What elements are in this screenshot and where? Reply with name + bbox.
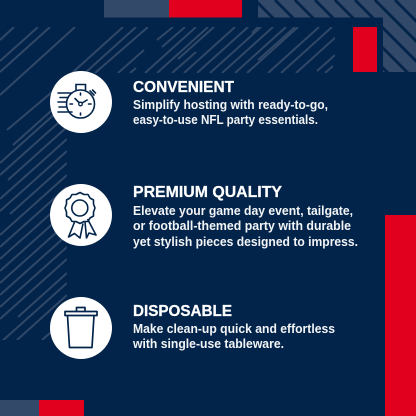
top right striped block [258, 0, 416, 72]
text: convenient [133, 79, 328, 127]
top slate bar [104, 0, 169, 18]
text: disposable [132, 303, 335, 351]
body: convenient line 2: easy-to-use NFL party essentials. [133, 112, 318, 127]
body: disposable line 2: with single-use tableware. [132, 336, 284, 351]
diagonal stripe texture, top and left [0, 27, 347, 343]
bottom slate bar [0, 400, 39, 416]
icon: stopwatch in white circle [50, 71, 112, 133]
body: premium quality line 3: yet stylish pieces designed to impress. [133, 234, 358, 249]
icon: trash bin in white circle [50, 297, 112, 359]
body: disposable line 1: Make clean-up quick and effortless [133, 321, 335, 336]
body: convenient line 1: Simplify hosting with ready-to-go, [133, 97, 328, 112]
heading: premium quality: PREMIUM QUALITY [133, 184, 282, 201]
heading: disposable: DISPOSABLE [133, 303, 232, 320]
heading: convenient: CONVENIENT [133, 79, 234, 96]
red accent block, lower right [385, 215, 416, 416]
body: premium quality line 2: or football-themed party with durable [133, 218, 351, 233]
text: premium quality [133, 184, 358, 249]
red accent block, top right [353, 27, 377, 72]
top red bar [169, 0, 242, 18]
bottom red bar [39, 400, 84, 416]
icon: award rosette in white circle [50, 184, 112, 246]
body: premium quality line 1: Elevate your game day event, tailgate, [133, 203, 353, 218]
